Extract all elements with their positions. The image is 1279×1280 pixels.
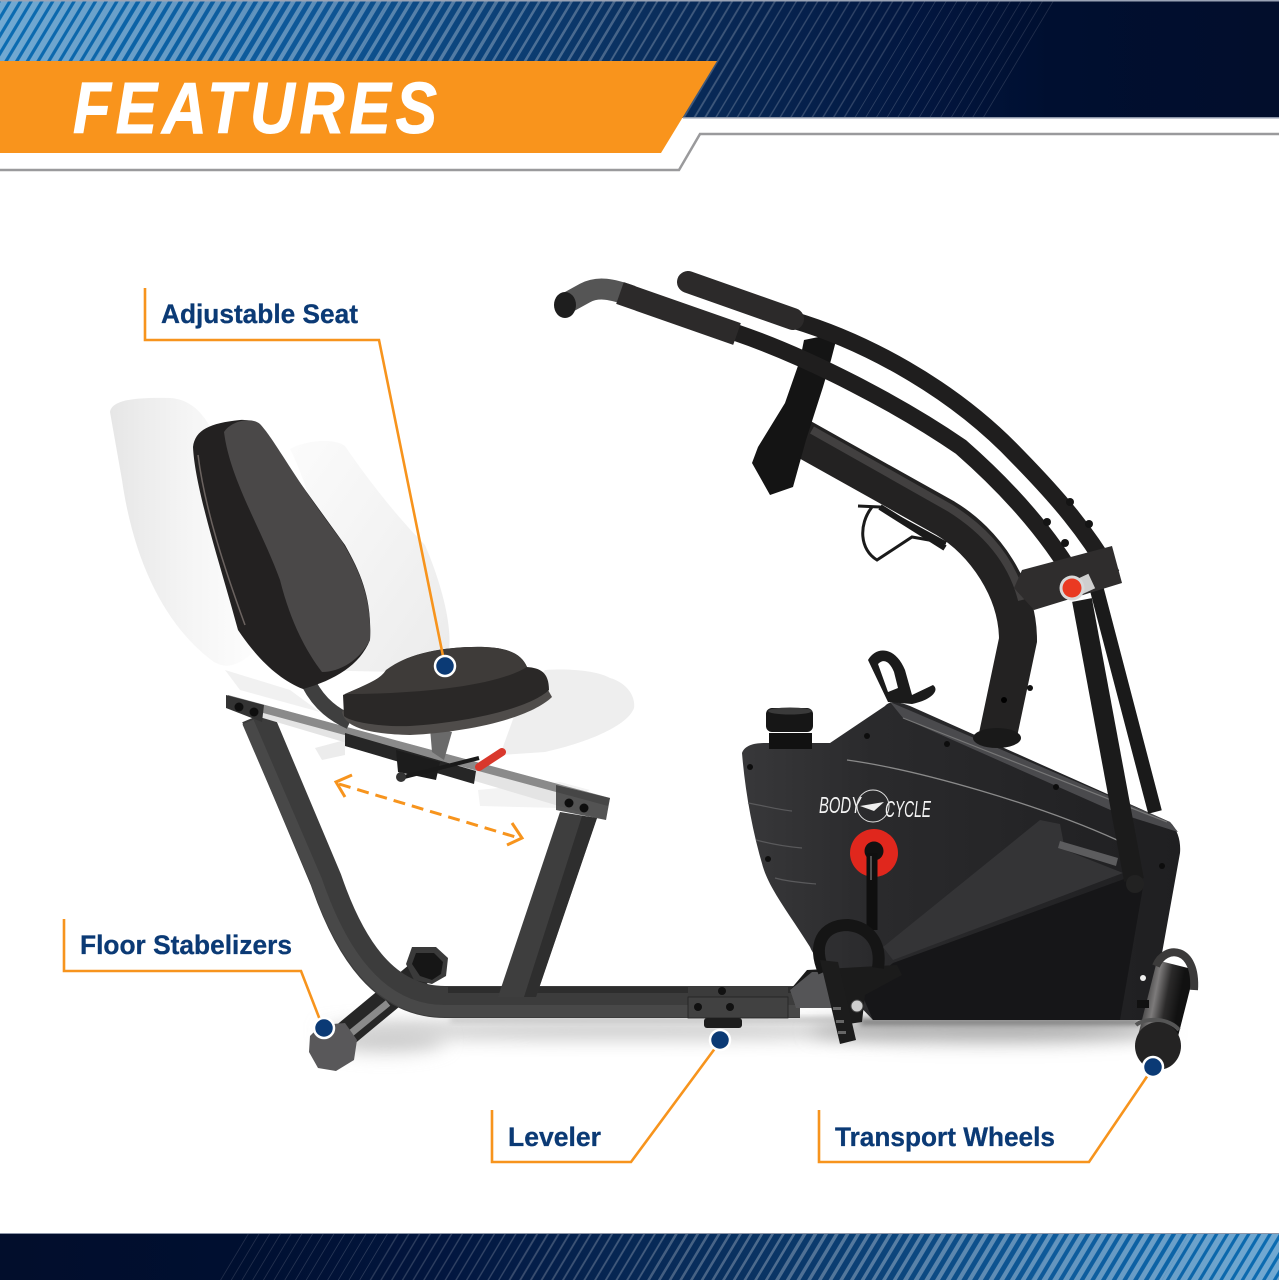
housing top highlight band (890, 702, 1178, 832)
front stabilizer end cap (309, 1023, 357, 1071)
handlebars and post (554, 282, 1155, 893)
rear transport roller (1135, 952, 1194, 1070)
bottle cage (858, 506, 946, 560)
logo (819, 790, 931, 822)
floor shadow (320, 1018, 1170, 1052)
red pop pin (1060, 574, 1095, 600)
callout: adjustable seat (145, 288, 455, 676)
seat cushion (342, 647, 552, 735)
ghost seat positions (110, 398, 634, 808)
lower belt shroud (860, 878, 1143, 1020)
front seat leg (257, 716, 800, 1002)
footer banner (0, 1233, 1279, 1280)
red crank hub (850, 829, 898, 930)
bike: main housing (742, 651, 1180, 1044)
title: FEATURES (73, 69, 442, 149)
console bracket (752, 333, 838, 495)
label: Floor Stabelizers (80, 930, 292, 960)
upper handlebar (688, 282, 1112, 575)
callout: floor stabelizers (64, 919, 334, 1038)
leveler bracket (688, 986, 788, 1028)
title ribbon (0, 61, 717, 153)
label: Leveler (508, 1122, 601, 1152)
marker dot (1143, 1057, 1163, 1077)
seat adjustment arrow (336, 775, 522, 845)
seat post (802, 430, 1033, 748)
callout: leveler (492, 1030, 730, 1162)
logo: BODY (819, 792, 862, 818)
seat slider and latch (345, 728, 502, 784)
header outline stroke (0, 134, 1279, 170)
seat backrest (193, 420, 370, 722)
seat rail (226, 695, 610, 820)
housing screws (747, 733, 1165, 869)
back upright bar (1097, 590, 1155, 812)
header banner (0, 0, 1279, 118)
marker dot (435, 656, 455, 676)
upright bolts (1043, 498, 1093, 547)
housing side grooves (748, 803, 816, 884)
front floor stabilizer (309, 947, 448, 1071)
heart rate strap mount (868, 651, 935, 704)
callout: transport wheels (819, 1057, 1163, 1162)
front upright bar (1082, 600, 1134, 880)
label: Transport Wheels (835, 1122, 1055, 1152)
chain cover (883, 820, 1123, 960)
label: Adjustable Seat (161, 299, 358, 329)
lower handlebar (554, 289, 1078, 585)
marker dot (314, 1018, 334, 1038)
pedal (790, 925, 902, 1044)
rear seat leg (498, 812, 597, 997)
marker dot (710, 1030, 730, 1050)
cross bracket (1014, 546, 1122, 610)
bike: frame (226, 695, 800, 1071)
tension knob (766, 708, 813, 749)
logo: CYCLE (885, 796, 931, 822)
